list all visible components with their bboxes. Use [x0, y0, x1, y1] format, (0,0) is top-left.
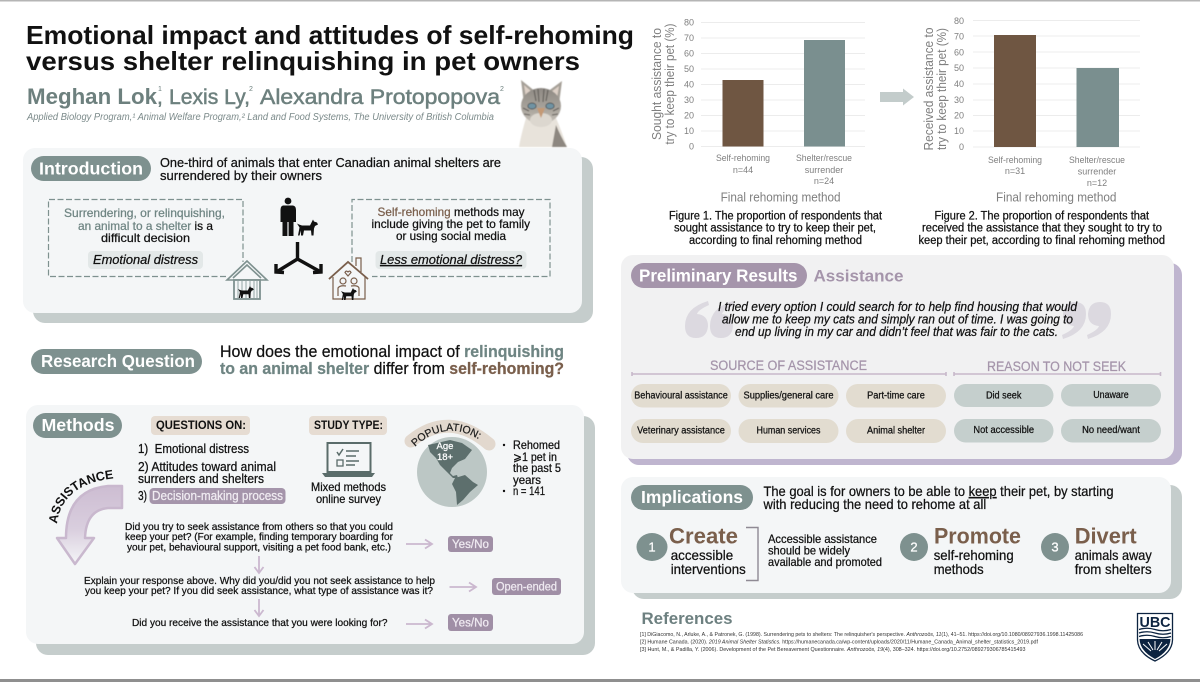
implication 1: create: interventions [671, 561, 746, 577]
survey question 1: your pet, behavioural support, visiting a pet food bank, etc.) [127, 542, 391, 554]
icon: population globe [404, 420, 496, 507]
bar chart: figure 1: 60 [684, 48, 694, 58]
callout: self-rehoming: or using social media [396, 229, 506, 243]
caption: figure 1: sought assistance to try to keep their pet, [674, 222, 876, 234]
callout: self-rehoming: Less emotional distress? [380, 253, 522, 267]
caption: figure 1: Figure 1. The proportion of respondents that [669, 210, 883, 222]
implication 2: promote: self-rehoming [934, 547, 1014, 563]
implications statement: The goal is for owners to be able to keep their pet, by starting [764, 483, 1114, 499]
question topics list: 1) Emotional distress [138, 442, 249, 456]
implications statement: with reducing the need to rehome at all [763, 496, 986, 512]
reason to not seek tags: Not accessible [973, 425, 1034, 436]
panel: methods [26, 405, 595, 655]
note: accessible assistance: available and promoted [768, 555, 882, 569]
panel: introduction [23, 148, 593, 323]
callout: surrendering: an animal to a shelter is a [78, 219, 213, 233]
implication 2: promote: 2 [910, 540, 918, 554]
caption: figure 1: according to final rehoming method [689, 235, 862, 247]
bar chart: figure 1: 0 [689, 142, 694, 152]
icon: shelter [227, 261, 267, 299]
bar chart: figure 2 [921, 16, 1140, 204]
note: accessible assistance: Accessible assistance [768, 532, 877, 546]
bar chart: figure 1: 80 [684, 18, 694, 28]
response: yes/no: Yes/No [452, 618, 489, 630]
participant quote [718, 299, 1078, 339]
question topics list: surrenders and shelters [138, 472, 264, 486]
icon: home with family [329, 258, 368, 300]
implication 2: promote: Promote [934, 524, 1021, 548]
source of assistance tags: Human services [756, 426, 820, 436]
bar chart: figure 2: Received assistance to [921, 28, 936, 150]
response: open-ended [492, 578, 561, 595]
population criteria: years [513, 473, 541, 487]
bar chart: figure 2: 0 [959, 142, 964, 152]
title [26, 20, 634, 76]
implication 3: divert: Divert [1075, 524, 1137, 548]
implication 1: create [636, 524, 746, 577]
population criteria [503, 438, 561, 498]
intro statement: surrendered by their owners [160, 168, 322, 183]
icon: population globe: Age [437, 441, 453, 452]
label: questions on [151, 416, 250, 435]
question topics list: Decision-making process [152, 489, 283, 503]
bar chart: figure 2: try to keep their pet (%) [934, 28, 949, 150]
implication 3: divert: 3 [1051, 540, 1059, 554]
bar chart: figure 1: Shelter/rescue [796, 153, 852, 163]
bar chart: figure 2: 30 [954, 95, 964, 105]
bar chart: figure 2: Self-rehoming [988, 155, 1042, 165]
bar chart: figure 1: n=24 [814, 176, 834, 186]
heading: methods: Methods [42, 415, 115, 435]
source of assistance tags: Supplies/general care [744, 390, 834, 402]
source of assistance tags: Behavioural assistance [634, 390, 728, 402]
note: accessible assistance [768, 532, 882, 569]
icon: population globe: 18+ [437, 452, 454, 463]
bar chart: figure 1 [649, 18, 865, 204]
source of assistance tags: Animal shelter [867, 426, 926, 436]
arrow: question 1 to 2 [254, 556, 264, 573]
arrow: assistance [49, 470, 124, 566]
heading: methods [33, 413, 122, 438]
heading: implications: Implications [641, 487, 743, 507]
icon: person and dog [280, 198, 318, 236]
reference list: [1] DiGiacomo, N., Arluke, A., & Patronek, G. (1998). Surrendering pets to shelters: The relinquisher's perspective. Anthrozoös, 11(1), 41–51. https://doi.org/10.1080/08927936.1998.11425086 [640, 632, 1083, 638]
participant quote: end up living in my car and didn’t feel that was fair to the cats. [735, 324, 1058, 339]
bar chart: figure 2: 20 [954, 110, 964, 120]
source of assistance tags: Part-time care [867, 390, 925, 402]
question topics list: 3) [138, 489, 147, 503]
logo: UBC [1138, 614, 1172, 661]
bar chart: figure 2: n=12 [1087, 178, 1107, 188]
callout: surrendering: difficult decision [101, 231, 190, 245]
intro statement: One-third of animals that enter Canadian animal shelters are [160, 155, 501, 170]
intro statement [160, 155, 501, 183]
title: Emotional impact and attitudes of self-rehoming [26, 20, 634, 50]
arrow: question 2 to 3 [254, 599, 264, 616]
callout: self-rehoming: Self-rehoming methods may [378, 205, 524, 219]
caption: figure 2: received the assistance that they sought to try to [922, 222, 1162, 234]
callout: surrendering [48, 200, 243, 276]
caption: figure 2: Figure 2. The proportion of respondents that [934, 210, 1150, 222]
bar chart: figure 2: 80 [954, 16, 964, 26]
bar chart: figure 2: 50 [954, 63, 964, 73]
arrow: question 3 to yes/no [406, 620, 432, 628]
label: questions on: QUESTIONS ON: [156, 420, 246, 432]
implications statement [763, 483, 1114, 512]
implication 1: create: Create [669, 524, 738, 548]
callout: self-rehoming [352, 200, 550, 276]
heading: introduction [31, 156, 151, 181]
bar chart: figure 2: 10 [954, 126, 964, 136]
authors: 2 [249, 86, 253, 93]
bar chart: figure 2: Shelter/rescue [1069, 155, 1125, 165]
response: yes/no [448, 536, 493, 552]
reference list: [2] Humane Canada. (2020). 2019 Animal Shelter Statistics. https://humanecanada.ca/wp-content/uploads/2020/11/Humane_Canada_Animal_shelter_statistics_2019.pdf [640, 640, 1038, 646]
heading: source of assistance: SOURCE OF ASSISTANCE [710, 358, 867, 373]
implication 3: divert [1041, 524, 1152, 577]
heading: references: References [642, 609, 732, 628]
affiliations: Applied Biology Program,¹ Animal Welfare Program,² Land and Food Systems, The University of British Columbia [26, 112, 494, 123]
reference list [640, 632, 1083, 653]
response: yes/no: Yes/No [452, 539, 489, 551]
arrow: assistance: ASSISTANCE [49, 470, 114, 524]
implication 3: divert: animals away [1075, 547, 1152, 563]
implication 3: divert: from shelters [1075, 561, 1152, 577]
population criteria: Rehomed [513, 438, 560, 452]
quotation marks [685, 301, 1111, 339]
source of assistance tags [631, 384, 946, 443]
research question text: How does the emotional impact of relinquishing [220, 343, 564, 361]
panel: preliminary results [621, 255, 1182, 465]
bar chart: figure 1: try to keep their pet (%) [662, 24, 677, 144]
logo: UBC: UBC [1140, 614, 1171, 631]
participant quote: allow me to keep my cats and simply ran out of time. I was going to [722, 312, 1073, 326]
arrow: splitting decision [276, 242, 321, 272]
caption: figure 2 [918, 210, 1165, 247]
heading: reason to not seek: REASON TO NOT SEEK [987, 359, 1126, 374]
study type text: Mixed methods [311, 480, 386, 494]
study type text: online survey [316, 492, 381, 506]
callout: surrendering: Surrendering, or relinquishing, [64, 206, 225, 220]
authors [27, 84, 504, 109]
bar chart: figure 2: surrender [1078, 166, 1116, 176]
callout: surrendering: Emotional distress [93, 253, 198, 267]
bar chart: figure 1: Sought assistance to [649, 28, 664, 140]
arrow: question 1 to yes/no [406, 540, 432, 548]
authors: 2 [500, 86, 504, 93]
bar chart: figure 1: 40 [684, 80, 694, 90]
authors: Lexis Ly, [169, 86, 250, 109]
implication 2: promote [900, 524, 1021, 577]
authors: Meghan Lok [27, 84, 158, 109]
heading: research question: Research Question [41, 351, 195, 371]
source of assistance tags: Veterinary assistance [637, 426, 725, 436]
authors: Alexandra Protopopova [260, 86, 500, 109]
bar chart: figure 1: n=44 [733, 165, 753, 175]
population criteria: the past 5 [513, 461, 561, 475]
question topics list [138, 442, 286, 504]
bracket [746, 528, 758, 580]
survey question 2 [84, 575, 435, 597]
implication 1: create: accessible [671, 547, 733, 563]
study type text [311, 480, 386, 506]
bar chart: figure 1: 10 [684, 126, 694, 136]
response: yes/no [448, 614, 493, 631]
authors: , [157, 86, 163, 109]
survey question 1: keep your pet? (For example, finding temporary boarding for [125, 531, 393, 543]
authors: 1 [158, 86, 162, 93]
note: accessible assistance: should be widely [768, 544, 850, 558]
reason to not seek tags: No need/want [1082, 425, 1140, 436]
bar chart: figure 1: 50 [684, 64, 694, 74]
participant quote: I tried every option I could search for to help find housing that would [718, 299, 1078, 314]
heading: preliminary results: Preliminary Results [639, 266, 798, 286]
bar chart: figure 2: n=31 [1005, 166, 1025, 176]
panel: implications [621, 477, 1182, 599]
survey question 1: Did you try to seek assistance from others so that you could [125, 521, 393, 533]
population criteria: ⩾1 pet in [513, 450, 557, 464]
bar chart: figure 1: 30 [684, 95, 694, 105]
bar chart: figure 1: 20 [684, 110, 694, 120]
reason to not seek tags [954, 384, 1161, 442]
bar chart: figure 2: 70 [954, 32, 964, 42]
bar chart: figure 2: 60 [954, 48, 964, 58]
title: versus shelter relinquishing in pet owners [26, 46, 580, 76]
heading: source of assistance [632, 358, 946, 376]
callout: self-rehoming: include giving the pet to family [372, 217, 530, 231]
caption: figure 2: keep their pet, according to final rehoming method [918, 235, 1165, 247]
reason to not seek tags: Unaware [1093, 390, 1129, 401]
reference list: [3] Hunt, M., & Padilla, Y. (2006). Development of the Pet Bereavement Questionnaire. Anthrozoös, 19(4), 308–324. https://doi.org/10.2752/089279306785415493 [640, 647, 1026, 653]
research question text [220, 343, 564, 378]
arrow: figure 1 to figure 2 [880, 88, 914, 106]
response: open-ended: Open-ended [496, 582, 557, 594]
bar chart: figure 1: surrender [805, 165, 843, 175]
population criteria: n = 141 [513, 484, 545, 498]
arrow: question 2 to open-ended [450, 582, 476, 592]
label: study type: STUDY TYPE: [314, 420, 383, 432]
label: study type [309, 416, 387, 435]
bar chart: figure 1: Final rehoming method [721, 190, 841, 204]
implication 2: promote: methods [934, 561, 984, 577]
implication 1: create: 1 [648, 540, 656, 554]
icon: population globe: POPULATION: [410, 423, 481, 446]
survey question 1 [125, 521, 393, 554]
subheading: assistance: Assistance [814, 266, 904, 286]
icon: laptop survey [322, 443, 375, 477]
caption: figure 1 [669, 210, 883, 247]
bar chart: figure 2: 40 [954, 79, 964, 89]
heading: introduction: Introduction [39, 158, 143, 178]
bar chart: figure 1: 70 [684, 33, 694, 43]
heading: implications [631, 485, 753, 510]
image: cat [519, 80, 567, 147]
bar chart: figure 2: Final rehoming method [996, 190, 1117, 204]
survey question 2: Explain your response above. Why did you/did you not seek assistance to help [84, 575, 435, 587]
survey question 2: you keep your pet? If you did seek assistance, what type of assistance was it? [85, 585, 433, 597]
heading: reason to not seek [954, 359, 1160, 376]
survey question 3: Did you receive the assistance that you were looking for? [132, 617, 388, 629]
research question text: to an animal shelter differ from self-rehoming? [220, 360, 564, 378]
bar chart: figure 1: Self-rehoming [716, 153, 770, 163]
reason to not seek tags: Did seek [986, 390, 1022, 402]
question topics list: 2) Attitudes toward animal [138, 460, 276, 474]
